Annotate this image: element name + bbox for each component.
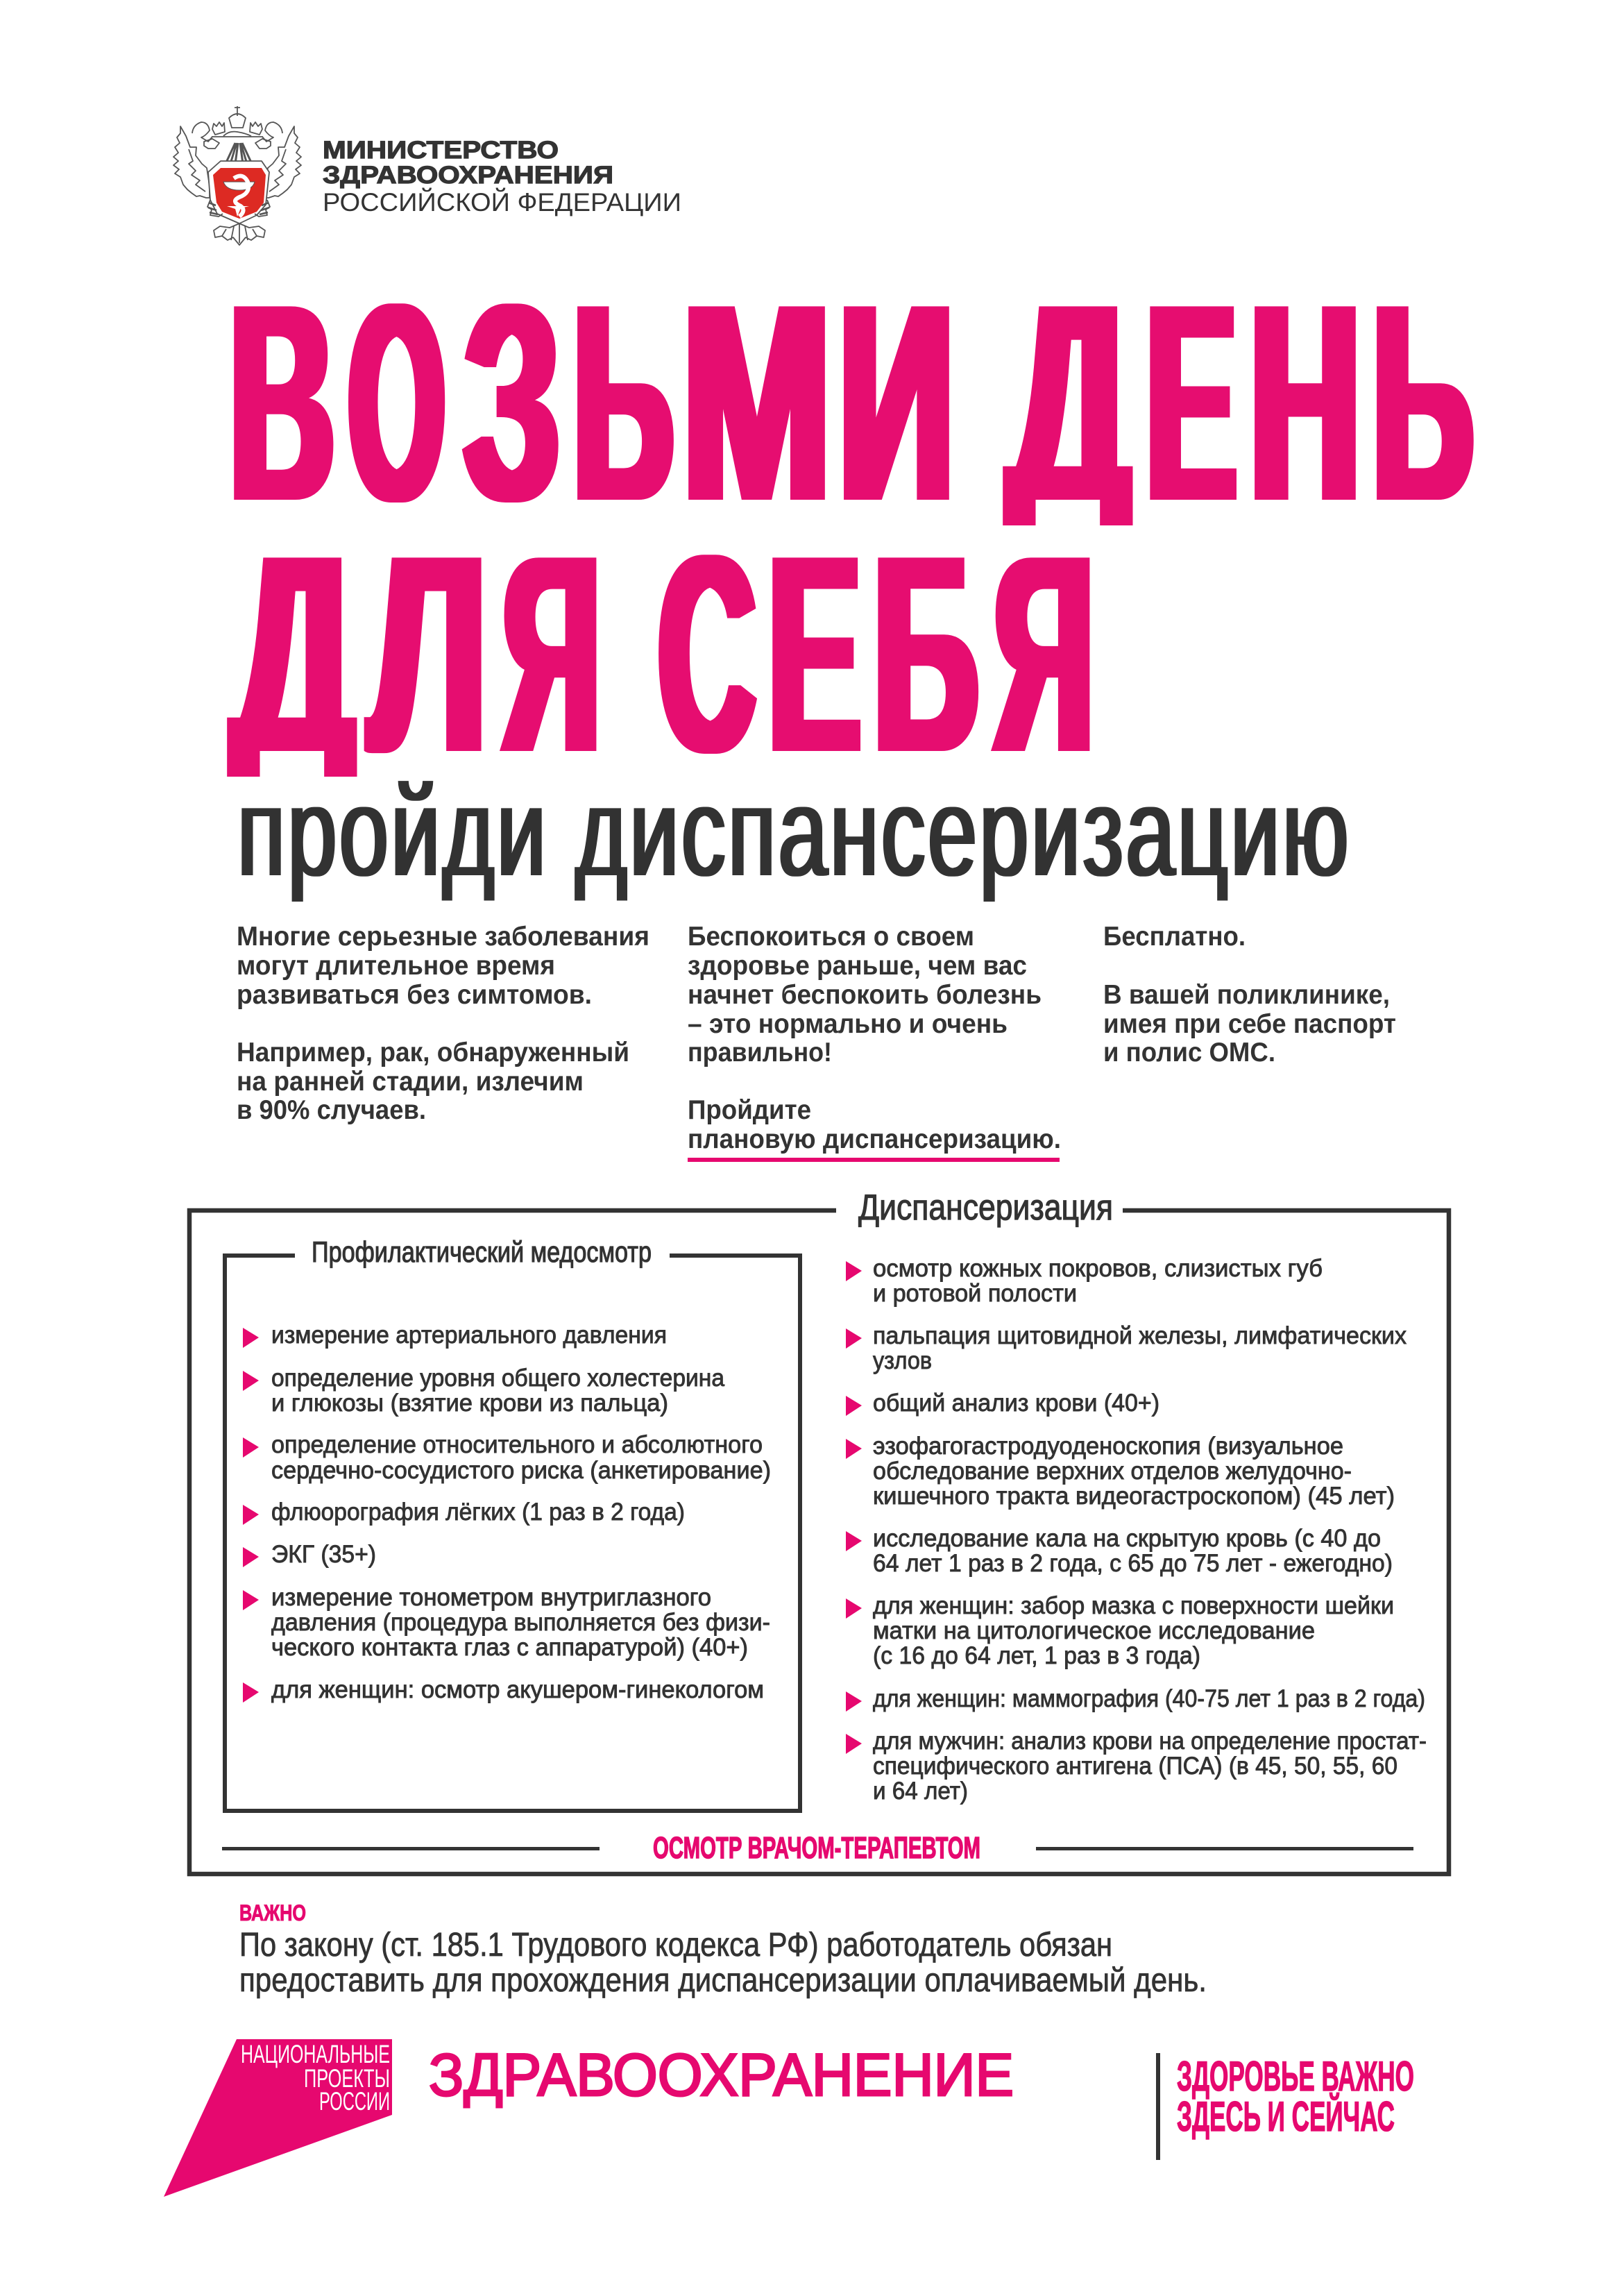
title: М — [683, 245, 831, 559]
text block: important note: По закону (ст. 185.1 Трудового кодекса РФ) работодатель обязан — [239, 1927, 1112, 1964]
title — [230, 245, 1472, 811]
logo: national projects of Russia: ПРОЕКТЫ — [304, 2064, 390, 2093]
text block: column 3: В вашей поликлинике, — [1103, 980, 1390, 1010]
slogan — [1177, 2053, 1414, 2140]
list item: ческого контакта глаз с аппаратурой) (40+) — [271, 1634, 748, 1661]
list item: определение относительного и абсолютного — [271, 1431, 763, 1458]
text block: important note: ВАЖНО — [239, 1900, 306, 1925]
title: О — [349, 245, 444, 559]
title: Е — [1147, 245, 1236, 559]
slogan: ЗДОРОВЬЕ ВАЖНО — [1177, 2053, 1414, 2100]
ministry name — [323, 137, 681, 217]
list item: и ротовой полости — [873, 1280, 1077, 1307]
list item — [846, 1322, 1407, 1374]
callout: examination by therapist — [222, 1831, 1413, 1865]
text block: column 1: развиваться без симтомов. — [237, 980, 592, 1010]
list item — [243, 1365, 725, 1417]
list item: для женщин: забор мазка с поверхности шейки — [873, 1592, 1394, 1619]
panel: preventive check-up — [225, 1235, 800, 1811]
text block: column 2: правильно! — [688, 1038, 832, 1067]
list item — [846, 1728, 1427, 1805]
title: Д — [1008, 245, 1130, 559]
title: Н — [1250, 245, 1360, 559]
title: В — [230, 245, 334, 559]
text block: column 2: Беспокоиться о своем — [688, 922, 974, 952]
header: ministry logo — [173, 106, 681, 245]
list item: определение уровня общего холестерина — [271, 1365, 725, 1392]
icon: double-headed eagle emblem — [173, 106, 301, 245]
list item: узлов — [873, 1347, 932, 1374]
title: Я — [994, 496, 1093, 811]
text block: column 3: и полис ОМС. — [1103, 1038, 1275, 1067]
list item — [846, 1433, 1395, 1510]
list item: пальпация щитовидной железы, лимфатических — [873, 1322, 1407, 1349]
text block: column 2 — [688, 922, 1061, 1162]
title: Ь — [574, 245, 672, 559]
panel: dispensarization frame — [189, 1188, 1449, 1874]
text block: column 2: здоровье раньше, чем вас — [688, 951, 1027, 981]
list item — [243, 1584, 770, 1661]
title: Я — [503, 496, 600, 811]
list item: давления (процедура выполняется без физи- — [271, 1609, 770, 1636]
list item: матки на цитологическое исследование — [873, 1617, 1315, 1644]
callout: examination by therapist: ОСМОТР ВРАЧОМ-ТЕРАПЕВТОМ — [653, 1831, 980, 1865]
title: З — [464, 245, 559, 559]
ministry name: ЗДРАВООХРАНЕНИЯ — [323, 162, 613, 189]
text block: column 2: – это нормально и очень — [688, 1009, 1008, 1039]
text block: column 3: имея при себе паспорт — [1103, 1009, 1396, 1039]
title: С — [659, 496, 755, 811]
text block: column 1: на ранней стадии, излечим — [237, 1067, 584, 1097]
list item: 64 лет 1 раз в 2 года, с 65 до 75 лет - ежегодно) — [873, 1550, 1393, 1577]
list item: для женщин: осмотр акушером-гинекологом — [271, 1676, 764, 1703]
text block: column 3 — [1103, 922, 1396, 1067]
list item: эзофагогастродуоденоскопия (визуальное — [873, 1433, 1343, 1460]
text block: column 3: Бесплатно. — [1103, 922, 1246, 952]
text block: column 1: Например, рак, обнаруженный — [237, 1038, 629, 1067]
title: Д — [232, 496, 354, 811]
list item: общий анализ крови (40+) — [873, 1390, 1159, 1417]
list item: кишечного тракта видеогастроскопом) (45 лет) — [873, 1483, 1395, 1510]
list item: флюорография лёгких (1 раз в 2 года) — [271, 1499, 685, 1526]
text block: column 1: могут длительное время — [237, 951, 555, 981]
divider line — [1156, 2053, 1160, 2160]
heading: preventive check-up: Профилактический медосмотр — [312, 1235, 652, 1268]
text block: column 2: начнет беспокоить болезнь — [688, 980, 1042, 1010]
text block: column 2: Пройдите — [688, 1095, 811, 1125]
list item: обследование верхних отделов желудочно- — [873, 1458, 1352, 1485]
text block: column 1: Многие серьезные заболевания — [237, 922, 649, 952]
list item: сердечно-сосудистого риска (анкетирование) — [271, 1457, 771, 1484]
text block: important note — [239, 1900, 1207, 1999]
underline — [688, 1158, 1060, 1162]
list item: (с 16 до 64 лет, 1 раз в 3 года) — [873, 1642, 1200, 1669]
list item: измерение тонометром внутриглазного — [271, 1584, 711, 1611]
logo: national projects of Russia — [164, 2039, 392, 2197]
title: И — [839, 245, 954, 559]
list item — [846, 1592, 1394, 1669]
ministry name: МИНИСТЕРСТВО — [323, 137, 559, 164]
text: Ь — [1373, 245, 1472, 559]
list item: и 64 лет) — [873, 1778, 968, 1805]
heading: healthcare: ЗДРАВООХРАНЕНИЕ — [429, 2042, 1014, 2109]
slogan: ЗДЕСЬ И СЕЙЧАС — [1177, 2093, 1395, 2140]
logo: national projects of Russia: НАЦИОНАЛЬНЫЕ — [241, 2040, 390, 2068]
list item: специфического антигена (ПСА) (в 45, 50, 55, 60 — [873, 1753, 1397, 1780]
list item — [243, 1431, 771, 1484]
text block: important note: предоставить для прохождения диспансеризации оплачиваемый день. — [239, 1962, 1207, 1999]
list item — [846, 1525, 1393, 1577]
ministry name: РОССИЙСКОЙ ФЕДЕРАЦИИ — [323, 187, 681, 217]
list item: осмотр кожных покровов, слизистых губ — [873, 1255, 1323, 1282]
title: Л — [369, 496, 486, 811]
text block: column 1 — [237, 922, 649, 1125]
list item: измерение артериального давления — [271, 1322, 667, 1349]
list item: для женщин: маммография (40-75 лет 1 раз в 2 года) — [873, 1685, 1425, 1712]
text block: column 2: плановую диспансеризацию. — [688, 1124, 1061, 1154]
list item: для мужчин: анализ крови на определение простат- — [873, 1728, 1427, 1755]
heading: dispensarization: Диспансеризация — [858, 1188, 1113, 1228]
text block: column 1: в 90% случаев. — [237, 1095, 426, 1125]
list: dispensarization procedures — [846, 1255, 1427, 1805]
list item — [846, 1255, 1323, 1307]
icon: red shield with bowl of Hygieia — [213, 168, 266, 219]
title: Е — [770, 496, 860, 811]
list item: исследование кала на скрытую кровь (с 40 до — [873, 1525, 1381, 1552]
logo: national projects of Russia: РОССИИ — [319, 2087, 390, 2116]
list item: и глюкозы (взятие крови из пальца) — [271, 1390, 668, 1417]
list item: ЭКГ (35+) — [271, 1541, 376, 1568]
title: Б — [874, 496, 978, 811]
